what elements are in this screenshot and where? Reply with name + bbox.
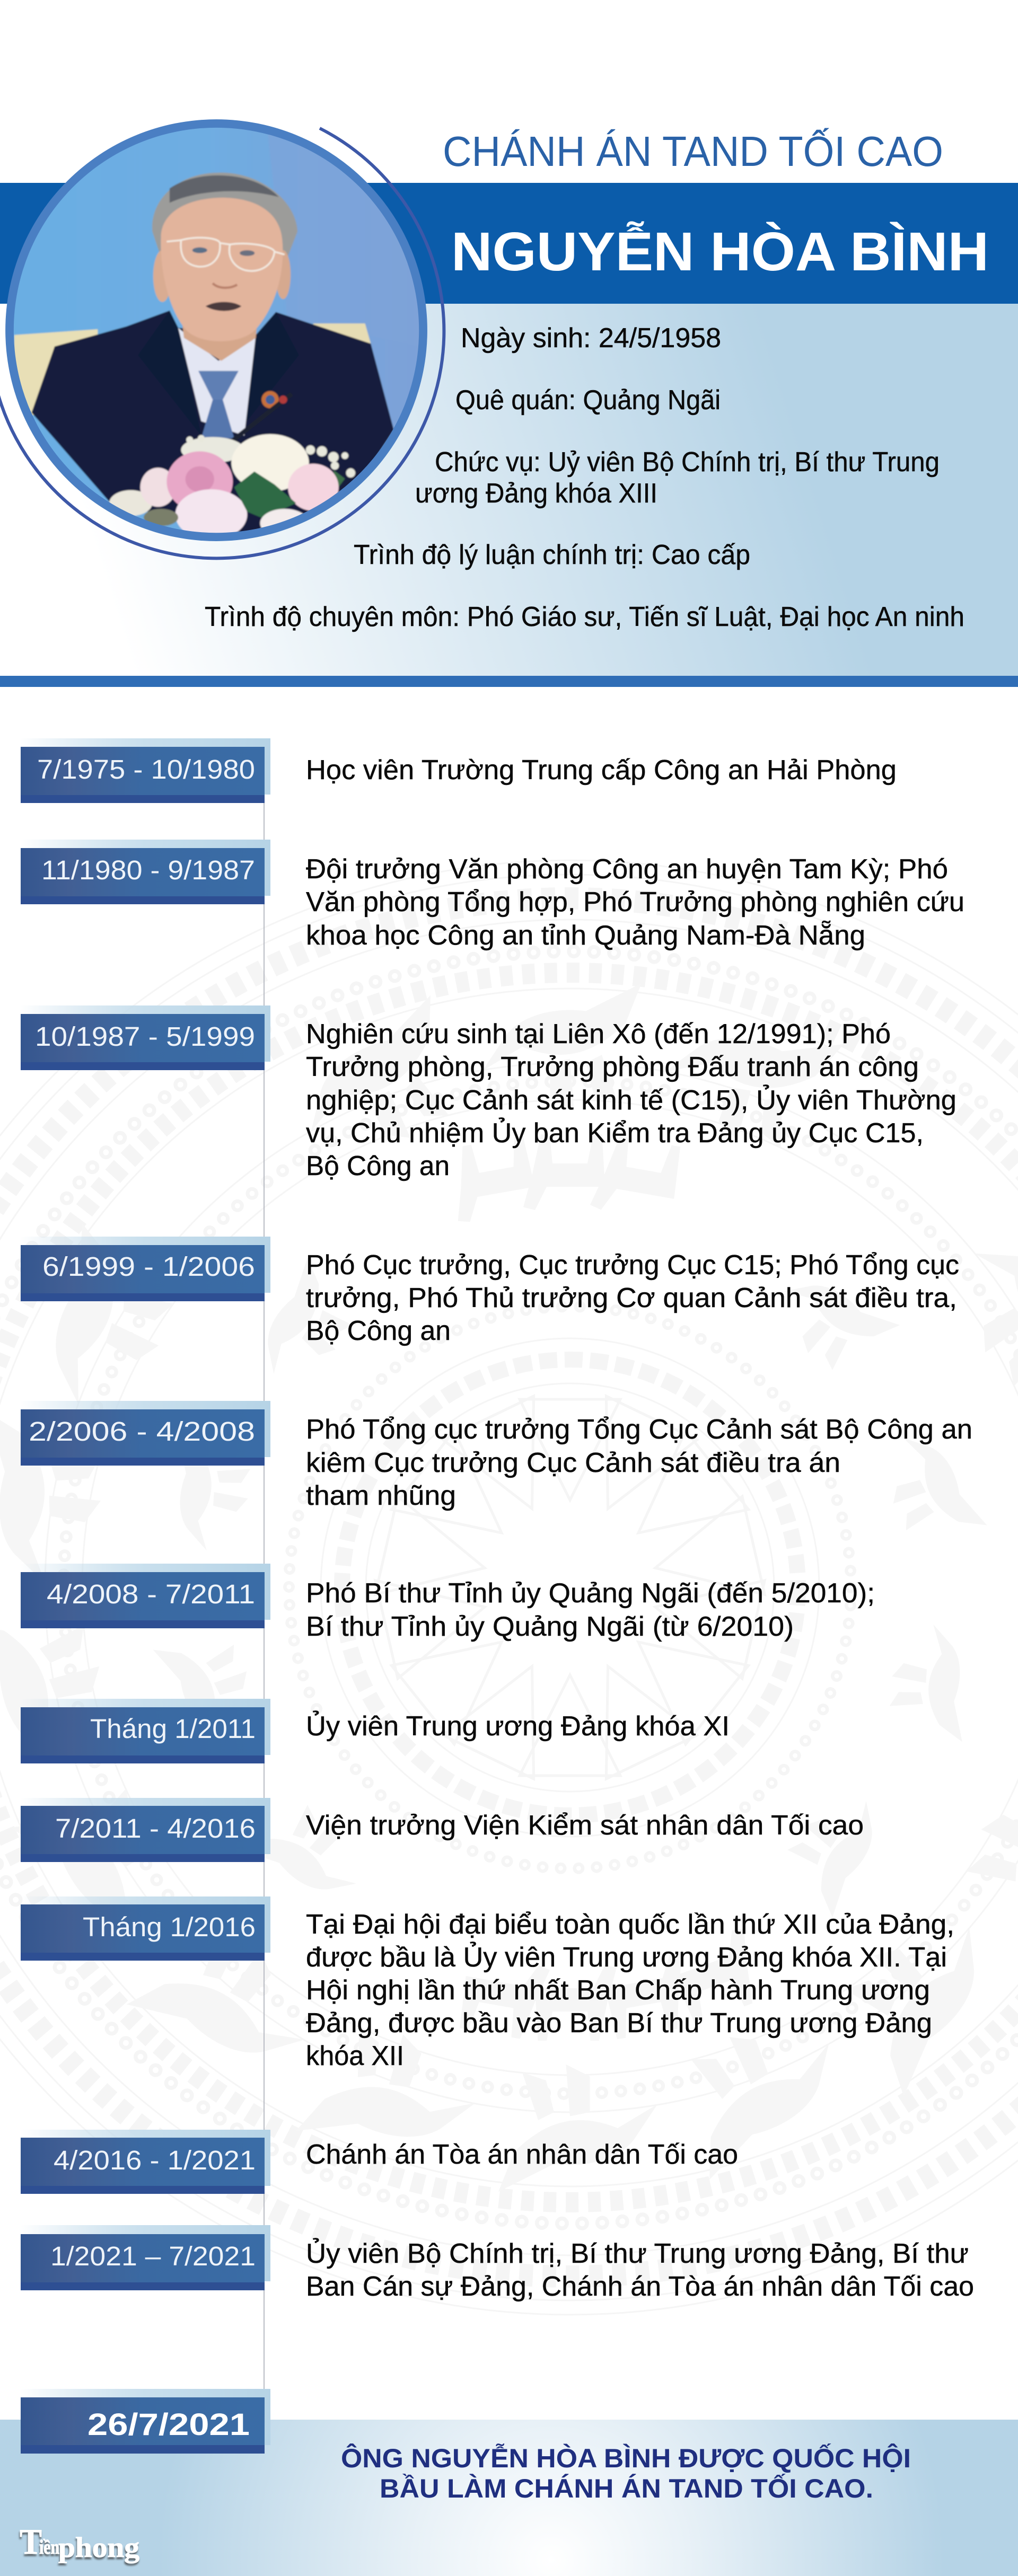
profile facts: Trình độ chuyên môn: Phó Giáo sư, Tiến sĩ Luật, Đại học An ninh [205, 602, 964, 632]
timeline entry: 7/2011 - 4/2016 [21, 1798, 864, 1862]
description: Học viên Trường Trung cấp Công an Hải Phòng [306, 755, 897, 786]
panel: header [0, 117, 1018, 687]
description: Phó Tổng cục trưởng Tổng Cục Cảnh sát Bộ Công an [306, 1414, 972, 1445]
description: Phó Bí thư Tỉnh ủy Quảng Ngãi (đến 5/2010); [306, 1578, 875, 1609]
profile facts [205, 323, 964, 632]
date tag [21, 2130, 270, 2194]
closing statement: BẦU LÀM CHÁNH ÁN TAND TỐI CAO. [380, 2473, 873, 2503]
profile facts: Chức vụ: Uỷ viên Bộ Chính trị, Bí thư Trung [435, 447, 940, 478]
description: trưởng, Phó Thủ trưởng Cơ quan Cảnh sát điều tra, [306, 1283, 957, 1313]
profile facts: Trình độ lý luận chính trị: Cao cấp [354, 540, 750, 570]
date tag [21, 1699, 270, 1763]
description [306, 1250, 959, 1346]
closing statement [341, 2443, 911, 2503]
description: Hội nghị lần thứ nhất Ban Chấp hành Trung ương [306, 1975, 930, 2006]
profile facts: Ngày sinh: 24/5/1958 [461, 323, 721, 354]
portrait photo [5, 119, 427, 541]
date tag [21, 1896, 270, 1961]
profile facts: ương Đảng khóa XIII [415, 478, 657, 509]
date tag [21, 1401, 270, 1466]
description: Văn phòng Tổng hợp, Phó Trưởng phòng nghiên cứu [306, 887, 964, 918]
description [306, 2238, 974, 2302]
logo: Tiền phong: T [20, 2521, 42, 2562]
profile background gradient [0, 304, 1018, 676]
description: Ban Cán sự Đảng, Chánh án Tòa án nhân dân Tối cao [306, 2271, 974, 2302]
panel: footer background [0, 2420, 1018, 2576]
date tag: 1/2021 – 7/2021 [50, 2241, 256, 2271]
date tag [21, 840, 270, 904]
title band [0, 183, 1018, 304]
timeline entry: 1/2021 – 7/2021 [21, 2225, 974, 2302]
timeline entry: Tháng 1/2011 [21, 1699, 730, 1763]
date tag: 7/2011 - 4/2016 [55, 1813, 256, 1843]
logo: Tiền phong: phong [58, 2531, 139, 2563]
description [306, 854, 964, 951]
date tag [21, 1237, 270, 1301]
date tag: 10/1987 - 5/1999 [35, 1021, 255, 1052]
description: Nghiên cứu sinh tại Liên Xô (đến 12/1991); Phó [306, 1019, 891, 1049]
heading: position: CHÁNH ÁN TAND TỐI CAO [443, 128, 943, 175]
date tag [21, 2225, 270, 2290]
timeline entry: 7/1975 - 10/1980 [21, 738, 897, 803]
timeline entry: 4/2008 - 7/2011 [21, 1564, 875, 1642]
logo: Tiền phong: iền [39, 2536, 59, 2559]
panel: timeline [21, 738, 974, 2302]
timeline entry: 6/1999 - 1/2006 [21, 1237, 959, 1346]
date tag: 7/1975 - 10/1980 [37, 754, 255, 784]
date tag: 6/1999 - 1/2006 [42, 1251, 255, 1282]
description: Đội trưởng Văn phòng Công an huyện Tam Kỳ; Phó [306, 854, 948, 885]
description: nghiệp; Cục Cảnh sát kinh tế (C15), Ủy viên Thường [306, 1084, 956, 1116]
decorative outer arc [0, 128, 444, 558]
description: Ủy viên Bộ Chính trị, Bí thư Trung ương Đảng, Bí thư [306, 2238, 969, 2269]
description: tham nhũng [306, 1480, 456, 1511]
date tag: Tháng 1/2011 [90, 1714, 256, 1744]
description: Viện trưởng Viện Kiểm sát nhân dân Tối cao [306, 1810, 864, 1841]
timeline entry: 2/2006 - 4/2008 [21, 1401, 972, 1511]
description [306, 1019, 956, 1181]
final date tag: 26/7/2021: 26/7/2021 [87, 2407, 250, 2442]
date tag: 2/2006 - 4/2008 [29, 1416, 255, 1446]
description: vụ, Chủ nhiệm Ủy ban Kiểm tra Đảng ủy Cục C15, [306, 1117, 924, 1149]
description: khoa học Công an tỉnh Quảng Nam-Đà Nẵng [306, 920, 865, 951]
timeline axis line [264, 803, 265, 2397]
timeline entry: 10/1987 - 5/1999 [21, 1005, 956, 1181]
date tag [21, 1798, 270, 1862]
description [306, 1909, 954, 2071]
timeline entry: 11/1980 - 9/1987 [21, 840, 964, 951]
description: Chánh án Tòa án nhân dân Tối cao [306, 2139, 738, 2170]
description: kiêm Cục trưởng Cục Cảnh sát điều tra án [306, 1448, 840, 1478]
background pattern: Dong Son drum watermark [0, 860, 1018, 2315]
description: Bộ Công an [306, 1316, 451, 1346]
date tag: 4/2008 - 7/2011 [47, 1579, 255, 1609]
date tag: 4/2016 - 1/2021 [54, 2145, 256, 2175]
date tag [21, 1005, 270, 1070]
description: được bầu là Ủy viên Trung ương Đảng khóa XII. Tại [306, 1942, 947, 1973]
date tag [21, 1564, 270, 1628]
profile facts: Quê quán: Quảng Ngãi [455, 385, 721, 416]
date tag: 11/1980 - 9/1987 [41, 855, 255, 885]
description [306, 1414, 972, 1511]
final date tag: 26/7/2021 [21, 2389, 270, 2454]
description: Trưởng phòng, Trưởng phòng Đấu tranh án công [306, 1052, 919, 1082]
logo: Tiền phong [20, 2521, 139, 2563]
description: Đảng, được bầu vào Ban Bí thư Trung ương Đảng [306, 2008, 932, 2039]
heading: name: NGUYỄN HÒA BÌNH [451, 220, 989, 282]
description: Bộ Công an [306, 1151, 450, 1181]
description [306, 1578, 875, 1642]
description: Tại Đại hội đại biểu toàn quốc lần thứ XII của Đảng, [306, 1909, 954, 1940]
description: Bí thư Tỉnh ủy Quảng Ngãi (từ 6/2010) [306, 1611, 794, 1642]
timeline entry: 4/2016 - 1/2021 [21, 2130, 738, 2194]
date tag: Tháng 1/2016 [83, 1912, 256, 1942]
bottom header strip [0, 676, 1018, 687]
date tag [21, 738, 270, 803]
timeline entry: Tháng 1/2016 [21, 1896, 954, 2071]
closing statement: ÔNG NGUYỄN HÒA BÌNH ĐƯỢC QUỐC HỘI [341, 2443, 911, 2473]
description: Ủy viên Trung ương Đảng khóa XI [306, 1710, 730, 1742]
description: Phó Cục trưởng, Cục trưởng Cục C15; Phó Tổng cục [306, 1250, 959, 1281]
description: khóa XII [306, 2041, 404, 2071]
